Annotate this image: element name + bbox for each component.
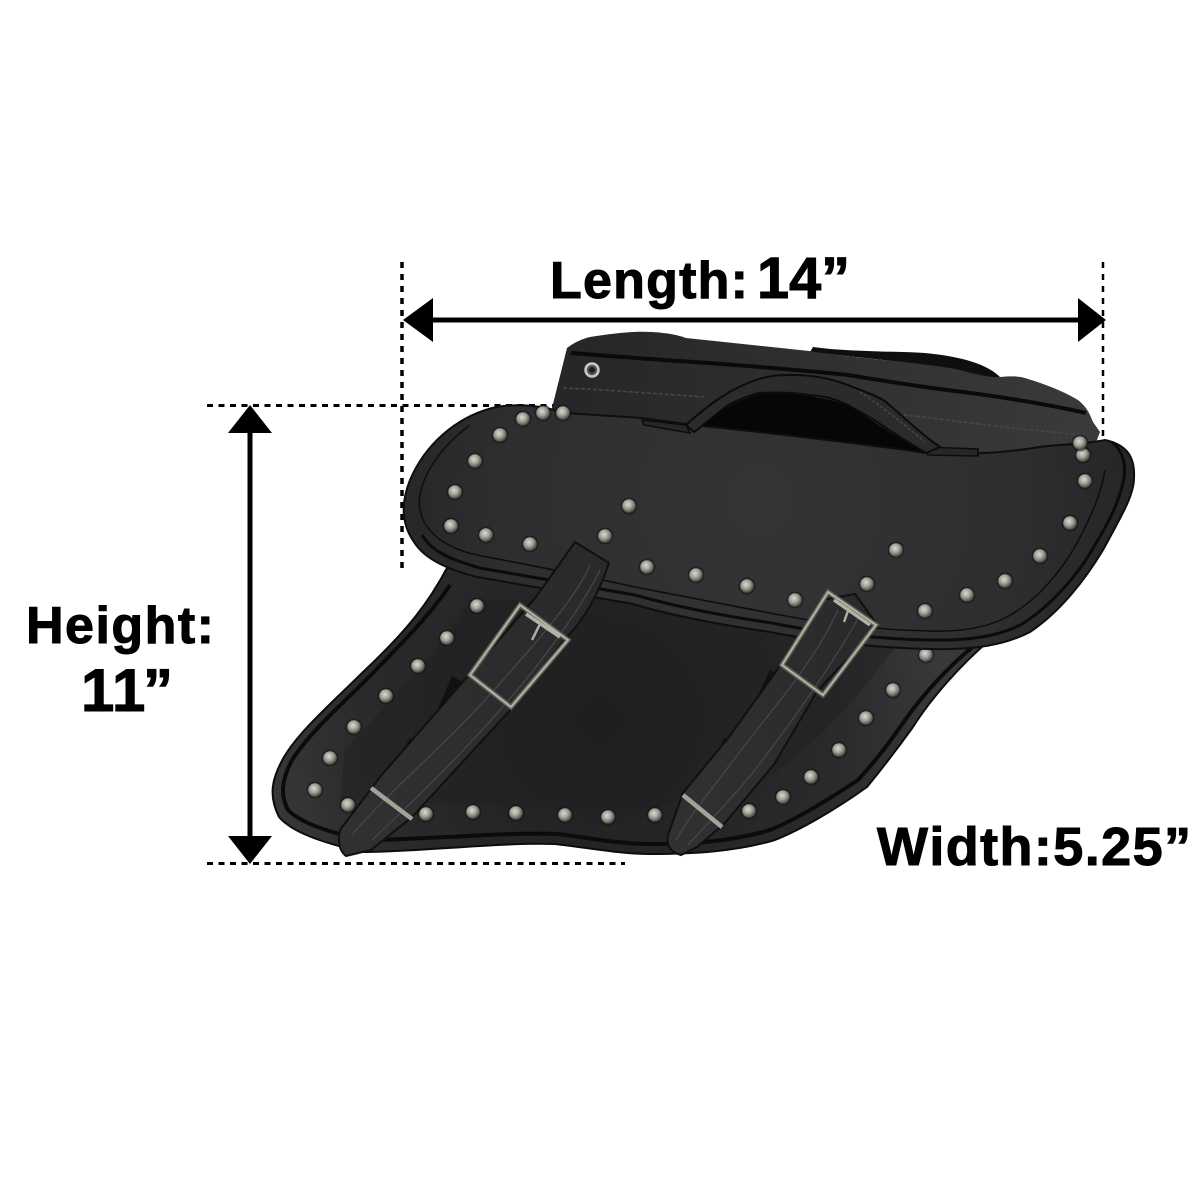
buckle: right: [782, 592, 876, 695]
arrow: height: [228, 405, 272, 864]
flap: [404, 405, 1134, 649]
height label: [26, 597, 214, 724]
length label: [550, 246, 850, 311]
width label: Width:5.25”: [877, 817, 1191, 877]
keeper: left: [371, 788, 412, 819]
carry handle: [642, 375, 978, 456]
top roll: [551, 332, 1100, 460]
strap: right: [668, 594, 876, 855]
lower rivets: [306, 598, 934, 826]
height label: 11”: [81, 657, 173, 724]
bag body: [273, 568, 990, 854]
arrow: length: [403, 298, 1106, 342]
length label: Length:: [550, 252, 748, 310]
saddlebag: [273, 332, 1134, 856]
side clips: [396, 670, 782, 775]
keeper: right: [683, 795, 722, 827]
upper rivets: [442, 404, 1094, 620]
dotted guide lines: [207, 262, 1103, 864]
height label: Height:: [26, 597, 214, 655]
strap: left: [339, 542, 609, 856]
buckle: left: [470, 605, 568, 707]
length label: 14”: [757, 246, 850, 311]
